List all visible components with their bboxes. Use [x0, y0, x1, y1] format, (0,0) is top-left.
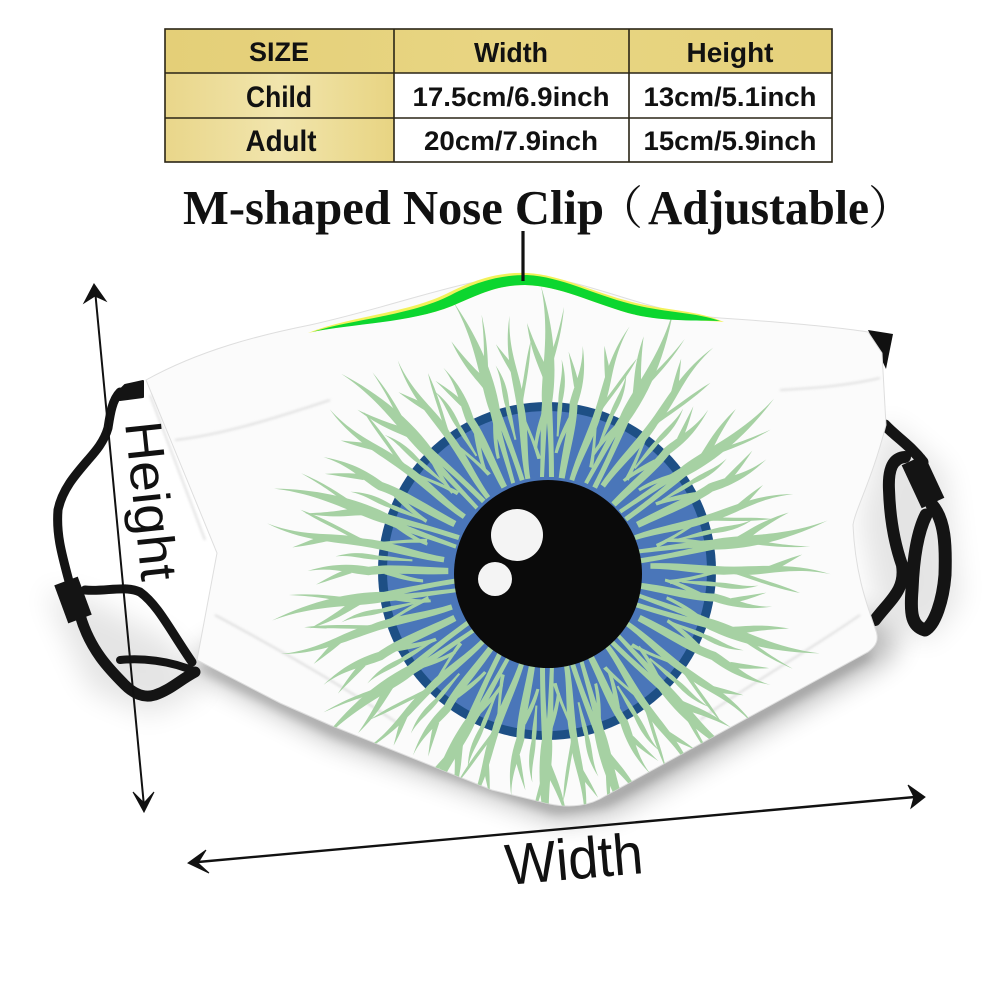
size table: Height [686, 37, 774, 68]
size table [165, 29, 832, 162]
heading: nose clip title: M-shaped Nose Clip [183, 180, 604, 235]
small highlight [478, 562, 512, 596]
size table: 20cm/7.9inch [424, 126, 598, 156]
panel: mask body [146, 276, 886, 806]
label: Height: Height [113, 418, 188, 584]
arrow: width [188, 785, 925, 873]
heading: nose clip title: ） [868, 172, 914, 238]
size table: Child [246, 81, 312, 114]
iris [378, 402, 716, 740]
mask shadow [45, 420, 960, 820]
illustration: eye [264, 286, 831, 856]
callout line to nose clip [521, 231, 525, 281]
size table: 17.5cm/6.9inch [412, 82, 610, 112]
pupil [454, 480, 642, 668]
iris and sclera rays [264, 286, 831, 856]
label: Width: Width [502, 821, 646, 898]
nose clip [308, 273, 724, 333]
size table: 15cm/5.9inch [644, 126, 816, 156]
size table: SIZE [249, 37, 309, 67]
size table: Width [474, 37, 548, 68]
arrow: height [84, 284, 154, 812]
left ear loop [58, 381, 196, 696]
right ear loop [868, 330, 945, 630]
heading: nose clip title [183, 172, 914, 238]
size table: 13cm/5.1inch [644, 82, 816, 112]
large highlight [491, 509, 543, 561]
size table: Adult [246, 125, 317, 158]
heading: nose clip title: Adjustable [648, 180, 869, 235]
heading: nose clip title: （ [597, 172, 643, 238]
